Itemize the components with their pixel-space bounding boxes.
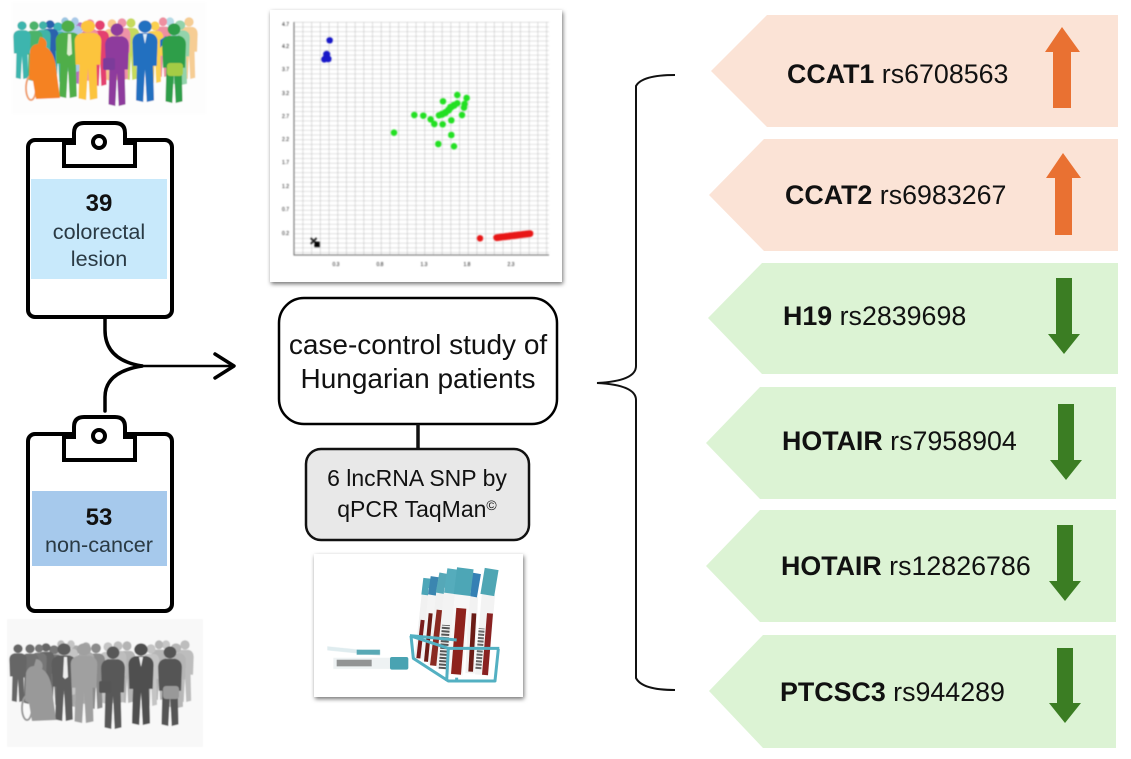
row: H19 rs2839698 down xyxy=(708,263,1118,374)
chart: genotyping scatter plot: 1.3 xyxy=(421,262,428,268)
chart: genotyping scatter plot: 4.7 xyxy=(282,22,289,28)
row: CCAT1 rs6708563 up: CCAT1 rs6708563 xyxy=(787,59,1008,89)
row: CCAT2 rs6983267 up: CCAT2 rs6983267 xyxy=(785,180,1006,210)
box: qPCR method xyxy=(306,449,529,540)
row: PTCSC3 rs944289 down: PTCSC3 rs944289 xyxy=(780,677,1005,707)
scatter points: red cluster xyxy=(477,234,530,242)
chart: genotyping scatter plot xyxy=(270,10,562,282)
arrow: down xyxy=(1048,278,1080,354)
chart: genotyping scatter plot: 1.8 xyxy=(464,262,471,268)
box: case-control study: case-control study of xyxy=(289,329,547,360)
arrow: down xyxy=(1050,404,1082,480)
chart: genotyping scatter plot: 1.7 xyxy=(282,160,289,166)
chart: genotyping scatter plot: 3.7 xyxy=(282,67,289,73)
row: HOTAIR rs12826786 down xyxy=(706,510,1116,622)
chart: genotyping scatter plot: 2.3 xyxy=(508,262,515,268)
chart: genotyping scatter plot: 0.8 xyxy=(377,262,384,268)
clipboard: non-cancer xyxy=(28,417,172,611)
chart: genotyping scatter plot: 0.7 xyxy=(282,207,289,213)
arrow: both groups merge into study xyxy=(105,319,234,411)
box: case-control study: Hungarian patients xyxy=(300,363,536,394)
box: qPCR method: 6 lncRNA SNP by xyxy=(327,465,507,491)
image: grey crowd of people xyxy=(7,619,203,747)
row: CCAT1 rs6708563 up xyxy=(711,15,1118,127)
box: qPCR method: © xyxy=(486,497,497,513)
scatter points: green cluster xyxy=(391,92,470,150)
image: blood sample tubes in rack xyxy=(314,554,523,697)
brace: grouping the six SNPs xyxy=(597,75,675,690)
clipboard: non-cancer: non-cancer xyxy=(45,532,153,557)
connector: study to qPCR xyxy=(416,424,420,449)
row: HOTAIR rs7958904 down: HOTAIR rs7958904 xyxy=(782,426,1017,456)
clipboard: colorectal lesion: lesion xyxy=(71,246,127,271)
clipboard: colorectal lesion: 39 xyxy=(86,190,112,217)
arrow: down xyxy=(1049,525,1081,601)
clipboard: colorectal lesion: colorectal xyxy=(53,219,145,244)
clipboard: colorectal lesion xyxy=(28,123,172,317)
row: PTCSC3 rs944289 down xyxy=(709,635,1116,748)
chart: genotyping scatter plot: 0.3 xyxy=(333,262,340,268)
chart: genotyping scatter plot: 3.2 xyxy=(282,91,289,97)
row: CCAT2 rs6983267 up xyxy=(709,139,1118,251)
chart: genotyping scatter plot: 2.2 xyxy=(282,137,289,143)
clipboard: non-cancer: 53 xyxy=(86,504,112,531)
chart: genotyping scatter plot: 2.7 xyxy=(282,114,289,120)
chart: genotyping scatter plot: 4.2 xyxy=(282,44,289,50)
image: colourful crowd of people xyxy=(12,2,206,114)
scatter points: black controls xyxy=(311,238,320,247)
arrow: up xyxy=(1046,153,1081,235)
arrow: up xyxy=(1045,27,1080,108)
row: HOTAIR rs12826786 down: HOTAIR rs12826786 xyxy=(781,551,1031,581)
chart: genotyping scatter plot: 0.2 xyxy=(282,231,289,237)
scatter points: blue cluster xyxy=(321,37,333,63)
row: HOTAIR rs7958904 down xyxy=(706,387,1116,499)
box: case-control study xyxy=(279,298,557,424)
row: H19 rs2839698 down: H19 rs2839698 xyxy=(783,301,966,331)
chart: genotyping scatter plot: 1.2 xyxy=(282,184,289,190)
box: qPCR method: qPCR TaqMan xyxy=(337,496,486,522)
arrow: down xyxy=(1049,648,1081,723)
